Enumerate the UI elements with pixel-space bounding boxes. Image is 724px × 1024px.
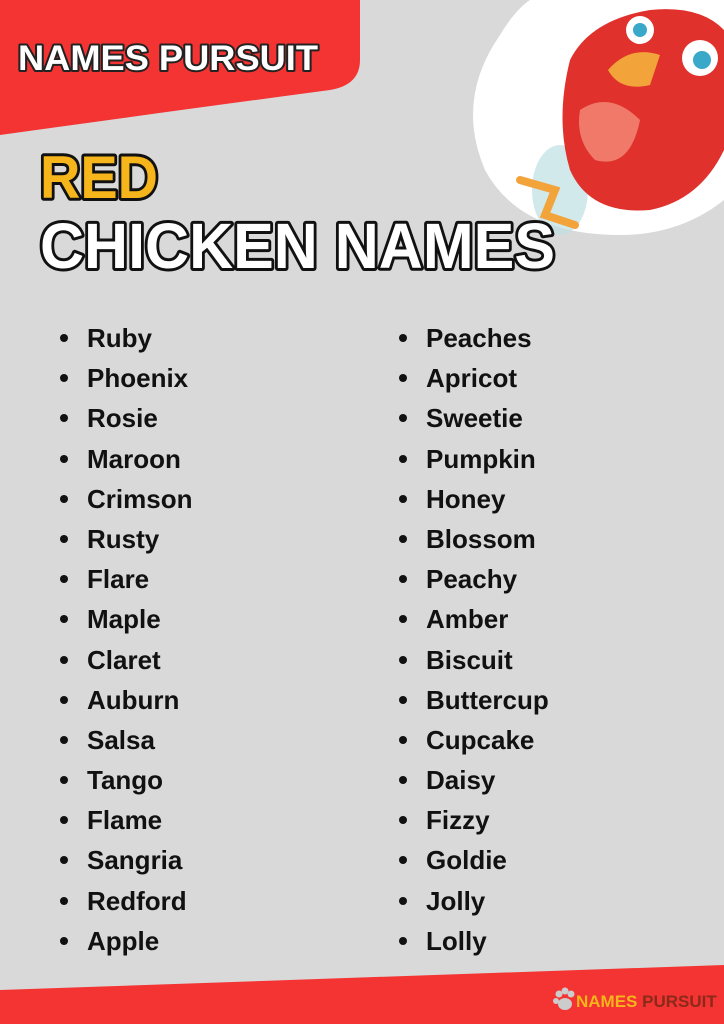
- list: left column: Claret: [87, 644, 161, 674]
- list: right column: Daisy: [426, 765, 495, 795]
- bottom red band: [0, 965, 724, 1024]
- list: right column: Pumpkin: [426, 444, 536, 474]
- footer logo: NAMES PURSUIT: [576, 992, 717, 1011]
- list: right column: [399, 323, 549, 956]
- list: right column: Biscuit: [426, 644, 513, 674]
- list: right column: Buttercup: [426, 685, 549, 715]
- list: left column: Rosie: [87, 403, 158, 433]
- list: right column: Cupcake: [426, 725, 534, 755]
- list: left column: Flame: [87, 805, 162, 835]
- chicken backdrop blob: [473, 0, 724, 235]
- list: right column: Honey: [426, 484, 505, 514]
- list: right column: Jolly: [426, 886, 485, 916]
- list: right column: Peaches: [426, 323, 532, 353]
- list: right column: Peachy: [426, 564, 517, 594]
- list: left column: Phoenix: [87, 363, 188, 393]
- icon: paw: [553, 988, 574, 1010]
- list: left column: Ruby: [87, 323, 152, 353]
- list: left column: Redford: [87, 886, 187, 916]
- list: left column: Maroon: [87, 444, 181, 474]
- list: right column: Apricot: [426, 363, 517, 393]
- list: right column: Blossom: [426, 524, 536, 554]
- list: left column: Flare: [87, 564, 149, 594]
- list: left column: [60, 323, 192, 956]
- list: right column: Fizzy: [426, 805, 490, 835]
- list: left column: Salsa: [87, 725, 155, 755]
- list: left column: Apple: [87, 926, 159, 956]
- list: right column: Goldie: [426, 845, 507, 875]
- list: left column: Rusty: [87, 524, 159, 554]
- footer logo: [553, 988, 717, 1011]
- list: left column: Maple: [87, 604, 161, 634]
- title: [40, 144, 556, 280]
- list: left column: Sangria: [87, 845, 182, 875]
- list: right column: Sweetie: [426, 403, 523, 433]
- title: RED: [40, 144, 158, 211]
- title: CHICKEN NAMES: [40, 210, 555, 280]
- list: left column: Crimson: [87, 484, 192, 514]
- list: right column: Lolly: [426, 926, 487, 956]
- list: left column: Tango: [87, 765, 163, 795]
- list: left column: Auburn: [87, 685, 179, 715]
- brand heading: NAMES PURSUIT: [18, 39, 318, 78]
- list: right column: Amber: [426, 604, 508, 634]
- icon: red chicken: [516, 9, 724, 235]
